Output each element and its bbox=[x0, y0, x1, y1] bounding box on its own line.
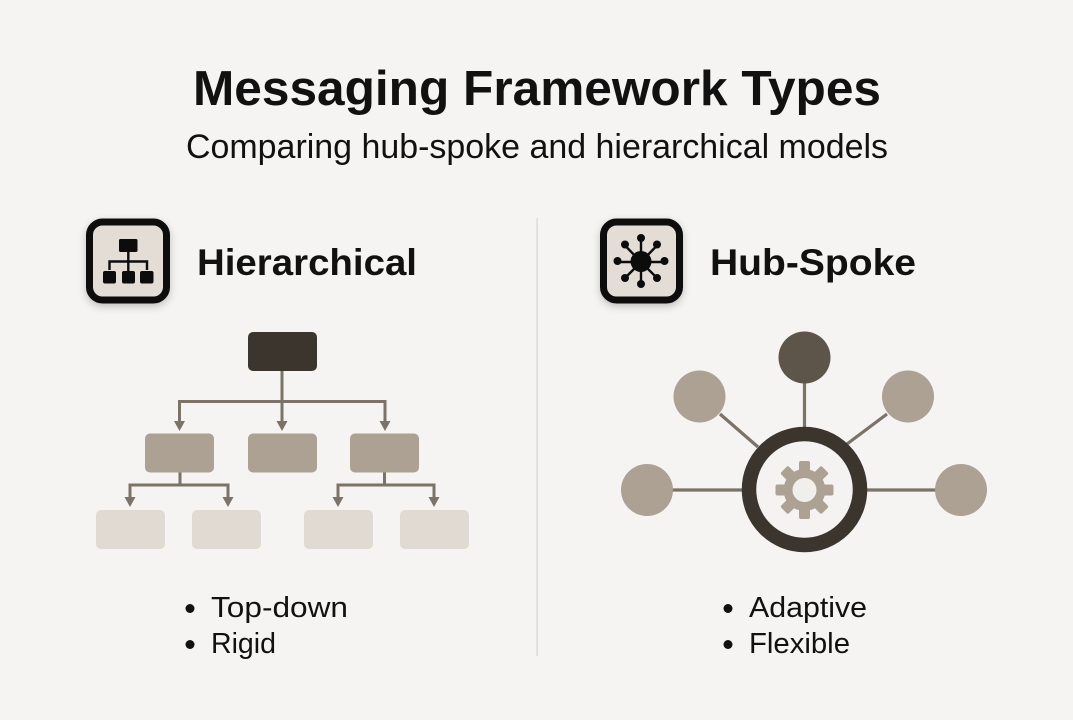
spoke nodes bbox=[621, 370, 987, 516]
title: Messaging Framework Types bbox=[193, 62, 881, 116]
bullets: hub-spoke bbox=[724, 592, 867, 660]
icon: hub and spoke bbox=[604, 222, 680, 300]
hub diagram bbox=[621, 332, 987, 545]
middle nodes bbox=[145, 434, 419, 472]
icon: gear bbox=[776, 461, 834, 519]
bullets: hierarchical bbox=[186, 592, 348, 660]
heading: hub-spoke: Hub-Spoke bbox=[710, 242, 916, 283]
spoke node: top bbox=[778, 332, 830, 384]
bullets: hierarchical: Rigid bbox=[211, 628, 276, 660]
bottom nodes bbox=[96, 510, 469, 549]
hub ring bbox=[749, 434, 860, 545]
arrowheads bbox=[124, 421, 440, 507]
connectors bbox=[130, 371, 434, 499]
top node bbox=[248, 332, 317, 371]
subtitle: Comparing hub-spoke and hierarchical models bbox=[186, 128, 888, 166]
panel: hierarchical bbox=[90, 222, 469, 660]
bullets: hub-spoke: Flexible bbox=[749, 628, 850, 660]
spokes bbox=[670, 380, 938, 490]
bullets: hierarchical: Top-down bbox=[211, 592, 348, 624]
icon: hierarchy bbox=[90, 222, 166, 300]
bullets: hub-spoke: Adaptive bbox=[749, 592, 867, 624]
tree diagram bbox=[96, 332, 469, 549]
heading: hierarchical: Hierarchical bbox=[197, 242, 417, 283]
panel: hub-spoke bbox=[604, 222, 987, 660]
